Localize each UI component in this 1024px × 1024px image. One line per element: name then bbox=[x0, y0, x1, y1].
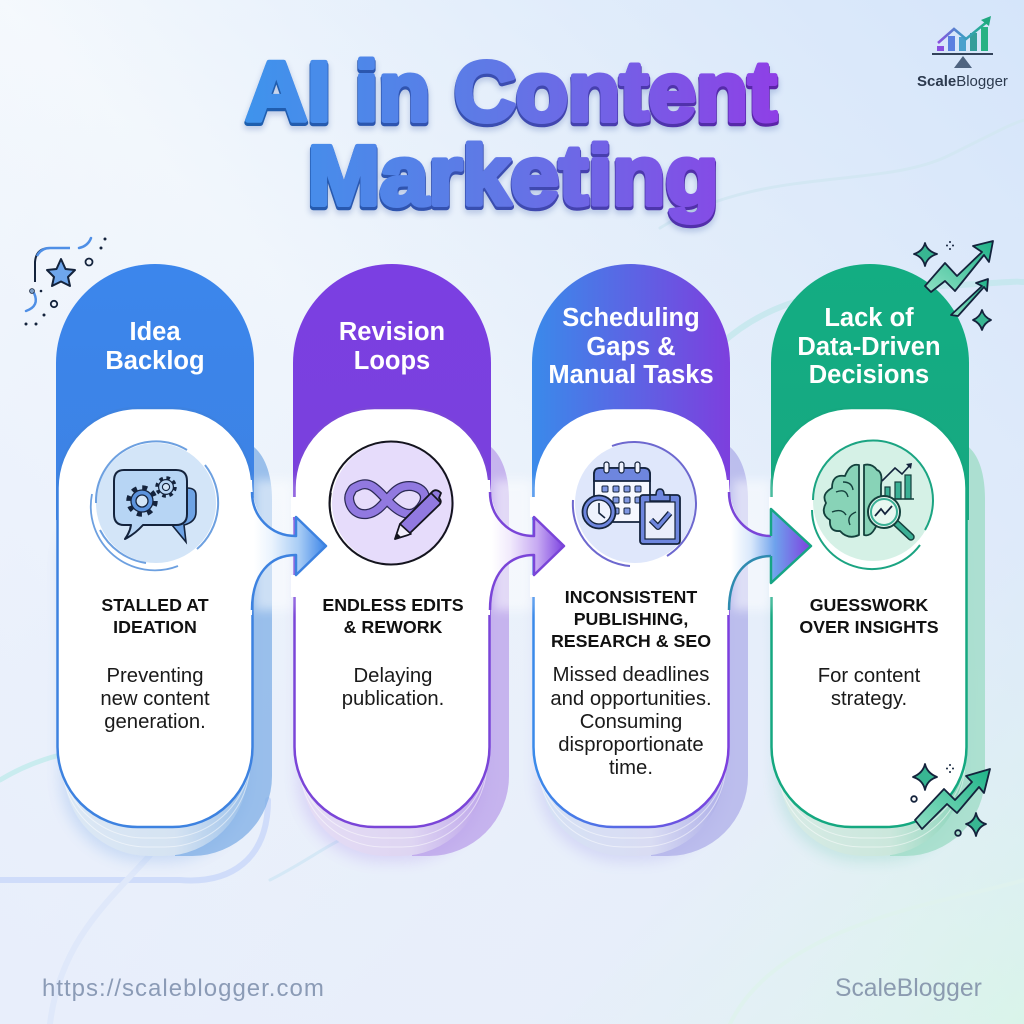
card stack layers bbox=[536, 440, 748, 862]
arrow: Idea Backlog to Revision Loops bbox=[240, 480, 326, 615]
body text: and opportunities. bbox=[550, 688, 712, 710]
card stack layers bbox=[775, 440, 985, 862]
body text: Missed deadlines bbox=[553, 664, 709, 686]
body text: Consuming bbox=[580, 711, 682, 733]
body text: generation. bbox=[104, 711, 206, 733]
heading: Revision bbox=[339, 318, 445, 346]
white body bbox=[294, 408, 490, 827]
decoration: growth arrows bottom right bbox=[911, 764, 990, 836]
body text: time. bbox=[609, 757, 653, 779]
white body bbox=[58, 408, 252, 827]
title: AI in Content bbox=[246, 50, 776, 144]
title: AI in Content bbox=[246, 47, 776, 141]
subheading: PUBLISHING, bbox=[574, 609, 688, 629]
heading: Lack of bbox=[824, 304, 914, 332]
white body bbox=[772, 408, 966, 827]
body text: strategy. bbox=[831, 688, 907, 710]
white body bbox=[534, 408, 728, 827]
subheading: IDEATION bbox=[113, 617, 197, 637]
subheading: GUESSWORK bbox=[810, 595, 928, 615]
decoration: star and dots bbox=[24, 238, 106, 326]
icon: infinity loop with pencil bbox=[330, 442, 454, 564]
heading: Idea bbox=[129, 318, 181, 346]
subheading: STALLED AT bbox=[101, 595, 209, 615]
body text: Preventing bbox=[107, 665, 203, 687]
title: AI in Content bbox=[246, 44, 776, 138]
heading: Loops bbox=[354, 347, 430, 375]
body text: For content bbox=[818, 665, 921, 687]
header shape bbox=[56, 264, 254, 520]
footer: brand name: ScaleBlogger bbox=[835, 975, 982, 1002]
panel: Lack of Data-Driven Decisions bbox=[771, 264, 985, 862]
body text: disproportionate bbox=[558, 734, 704, 756]
subheading: & REWORK bbox=[344, 617, 443, 637]
heading: Gaps & bbox=[586, 333, 676, 361]
panel: Scheduling Gaps and Manual Tasks bbox=[532, 264, 748, 862]
header shape bbox=[293, 264, 491, 520]
heading: Data-Driven bbox=[797, 333, 941, 361]
panel: Revision Loops bbox=[293, 264, 509, 862]
heading: Decisions bbox=[809, 361, 929, 389]
title bbox=[246, 44, 776, 228]
arrow: Scheduling to Data-Driven bbox=[717, 480, 811, 615]
decoration: growth arrows top right bbox=[914, 241, 993, 330]
panel: Idea Backlog bbox=[56, 264, 272, 862]
footer: website url: https://scaleblogger.com bbox=[42, 975, 325, 1002]
logo: ScaleBlogger bbox=[917, 16, 1008, 90]
subheading: INCONSISTENT bbox=[565, 587, 697, 607]
subheading: RESEARCH & SEO bbox=[551, 631, 711, 651]
body text: Delaying bbox=[354, 665, 432, 687]
subheading: ENDLESS EDITS bbox=[322, 595, 464, 615]
card stack layers bbox=[297, 440, 509, 862]
subheading: OVER INSIGHTS bbox=[799, 617, 939, 637]
heading: Manual Tasks bbox=[548, 361, 714, 389]
icon: chat bubbles with gears bbox=[91, 441, 218, 570]
card stack layers bbox=[60, 440, 272, 862]
icon: calendar, clock and clipboard bbox=[573, 442, 696, 566]
heading: Backlog bbox=[105, 347, 205, 375]
title: Marketing bbox=[308, 134, 718, 228]
header shape bbox=[771, 264, 969, 520]
title: Marketing bbox=[308, 131, 718, 225]
body text: publication. bbox=[342, 688, 444, 710]
header shape bbox=[532, 264, 730, 520]
logo: ScaleBlogger: ScaleBlogger bbox=[917, 73, 1008, 90]
heading: Scheduling bbox=[562, 304, 700, 332]
title: Marketing bbox=[308, 128, 718, 222]
body text: new content bbox=[100, 688, 210, 710]
icon: brain with chart and magnifier bbox=[812, 441, 933, 569]
arrow: Revision Loops to Scheduling bbox=[478, 480, 564, 615]
